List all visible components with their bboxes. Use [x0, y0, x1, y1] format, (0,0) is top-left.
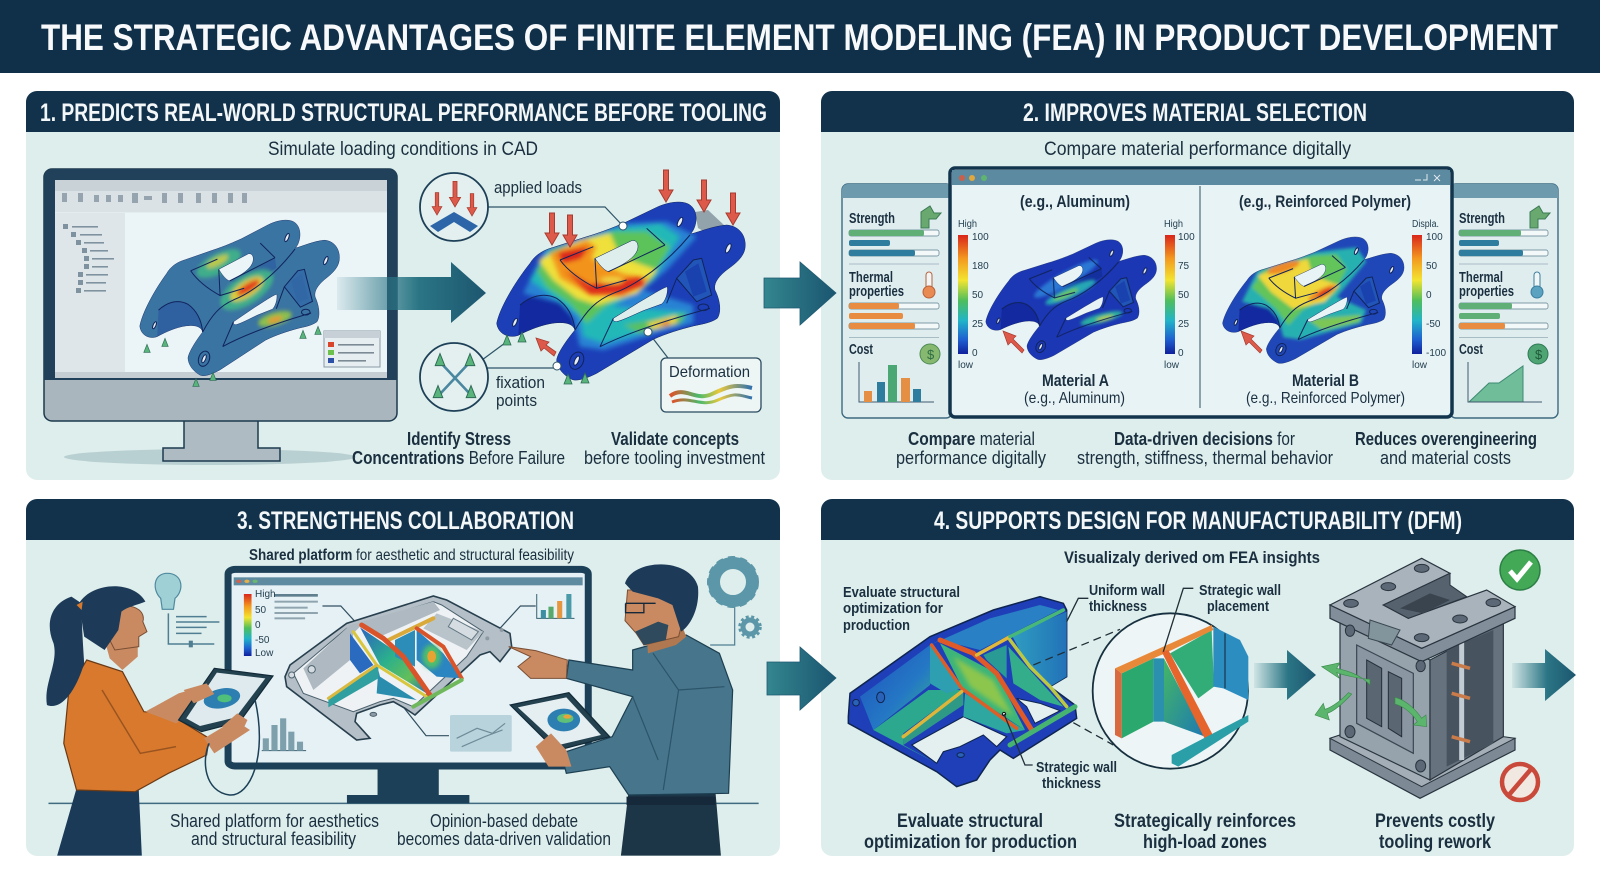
- panel 1: structural performance: [26, 91, 780, 480]
- text: shared platform: Shared platform for aesthetics: [170, 811, 379, 831]
- material A column: 25: [1178, 319, 1190, 330]
- bracket: material B: [1222, 236, 1404, 364]
- label: evaluate structural optimization: production: [843, 617, 910, 634]
- material A column: 50: [1178, 290, 1190, 301]
- panel 1 header: [26, 91, 780, 132]
- label: strategic wall thickness: [1036, 759, 1117, 792]
- callout: deformation: Deformation: [669, 364, 750, 381]
- label: uniform wall thickness: thickness: [1089, 598, 1147, 615]
- text: evaluate structural: Evaluate structural: [897, 811, 1043, 832]
- panel 4 subtitle: Visualizaly derived om FEA insights: [1064, 548, 1320, 567]
- label: strategic wall thickness: thickness: [1042, 775, 1101, 792]
- CAD bracket on screen: [140, 220, 340, 376]
- panel 1 subtitle: Simulate loading conditions in CAD: [268, 138, 538, 160]
- callout leader lines: [482, 207, 668, 368]
- panel 3 header: [26, 499, 780, 540]
- label: strategic wall thickness: Strategic wall: [1036, 759, 1117, 776]
- cost bar chart: [859, 362, 934, 402]
- housing with heat-mapped ribs: [285, 596, 512, 740]
- arrow: mold to outcome: [1512, 649, 1576, 701]
- card: material A properties: Thermal: [849, 270, 893, 286]
- icon: cost coin: [920, 344, 940, 364]
- screen scale labels: 50: [255, 605, 267, 616]
- cable: [205, 700, 259, 795]
- icon: strength: [1530, 206, 1550, 228]
- woman with tablet: [46, 586, 273, 856]
- label: evaluate structural optimization: Evaluate structural: [843, 584, 960, 601]
- screen scale labels: Low: [255, 648, 274, 659]
- card: material A properties: properties: [849, 284, 904, 300]
- on-screen legend: [324, 331, 380, 367]
- screen scale labels: High: [255, 589, 276, 600]
- panel 4 header: [821, 499, 1574, 540]
- text: identify stress concentrations: Identify Stress: [407, 429, 511, 449]
- monitor and floor scene: [48, 569, 759, 803]
- material B column: [1210, 192, 1446, 407]
- card: material B properties: Thermal: [1459, 270, 1503, 286]
- material A column: [958, 192, 1195, 407]
- leader lines: [1004, 598, 1120, 765]
- panel 3 subtitle: Shared platform for aesthetic and structural feasibility: [249, 547, 574, 564]
- icon: cost coin: $: [927, 347, 935, 362]
- label: strategic wall placement: [1199, 582, 1281, 615]
- magnified wall detail: [1093, 613, 1248, 769]
- FEA housing part: [848, 597, 1077, 787]
- text: before failure: Concentrations Before Failure: [352, 448, 565, 468]
- label: fixation points: points: [496, 392, 537, 410]
- material B column: 0: [1426, 290, 1432, 301]
- panel 2 header: [821, 91, 1574, 132]
- screen bar chart: [262, 718, 306, 751]
- text: strength stiffness thermal: strength, stiffness, thermal behavior: [1077, 448, 1333, 468]
- material B column: (e.g., Reinforced Polymer): [1246, 390, 1405, 407]
- panel 2: material selection: [821, 91, 1574, 480]
- panel 1 header: 1. PREDICTS REAL-WORLD STRUCTURAL PERFORMANCE BEFORE TOOLING: [40, 99, 767, 127]
- label: applied loads: applied loads: [494, 179, 582, 197]
- text: strategically reinforces: Strategically reinforces: [1114, 811, 1296, 832]
- FEA stress bracket: [496, 170, 746, 384]
- arrow: panel 1 to 2: [764, 262, 836, 325]
- cost area chart: [1468, 362, 1542, 402]
- text: performance digitally: performance digitally: [896, 448, 1046, 468]
- material B column: -100: [1426, 348, 1446, 359]
- material B column: 100: [1426, 232, 1443, 243]
- text: optimization for production: optimization for production: [864, 832, 1077, 853]
- screen text lines: [274, 594, 318, 619]
- text: prevents costly: Prevents costly: [1375, 811, 1495, 832]
- material A column: 0: [1178, 348, 1184, 359]
- load arrows: [536, 170, 740, 356]
- text: structural feasibility: and structural feasibility: [191, 829, 356, 849]
- text: reduces overengineering: Reduces overengineering: [1355, 429, 1537, 449]
- idea sketch icons: [155, 573, 219, 647]
- icon: prohibition sign: [1502, 764, 1538, 800]
- material A column: High: [958, 219, 977, 230]
- panel 2 header: 2. IMPROVES MATERIAL SELECTION: [1023, 99, 1367, 127]
- material A column: Material A: [1042, 371, 1109, 390]
- material A column: 100: [1178, 232, 1195, 243]
- label: uniform wall thickness: [1089, 582, 1165, 615]
- material A column: 25: [972, 319, 984, 330]
- large shared monitor: [228, 569, 588, 803]
- title banner: [0, 0, 1600, 73]
- material A column: 0: [972, 348, 978, 359]
- icon: check mark: [1500, 550, 1540, 590]
- icon: thermometer: [1531, 272, 1543, 298]
- FEA part with magnified detail: [848, 588, 1248, 787]
- text: tooling rework: tooling rework: [1379, 832, 1491, 853]
- text: compare material: Compare material: [908, 429, 1035, 449]
- material A column: High: [1164, 219, 1183, 230]
- text: opinion-based debate: Opinion-based debate: [430, 811, 578, 831]
- icon: strength: [921, 206, 941, 228]
- colour scale: [244, 594, 252, 656]
- bracket: material A: [974, 232, 1164, 366]
- material B column: low: [1412, 360, 1428, 371]
- material A column: (e.g., Aluminum): [1020, 192, 1130, 211]
- icon: thermometer: [923, 272, 935, 298]
- label: strategic wall placement: placement: [1207, 598, 1269, 615]
- icon: cost coin: [1528, 344, 1548, 364]
- material B column: Displa.: [1412, 219, 1439, 230]
- people and icons scene: [46, 564, 735, 856]
- label: evaluate structural optimization: [843, 584, 960, 634]
- material A column: low: [1164, 360, 1180, 371]
- icon: large gear: [709, 558, 757, 606]
- text: before tooling investment: before tooling investment: [584, 448, 765, 468]
- card: material A properties: Strength: [849, 211, 895, 227]
- icon: applied loads: [420, 173, 488, 241]
- text: and material costs: and material costs: [1380, 448, 1511, 468]
- green flow arrows: [1315, 663, 1427, 727]
- text: validate concepts: Validate concepts: [611, 429, 739, 449]
- arrow: part to mold: [1254, 650, 1316, 700]
- screen scale labels: [255, 589, 276, 659]
- material A column: 75: [1178, 261, 1190, 272]
- card: material B properties: Strength: [1459, 211, 1505, 227]
- text: data-driven decisions: Data-driven decisions for: [1114, 429, 1295, 449]
- material A column: 100: [972, 232, 989, 243]
- label: fixation points: fixation: [496, 374, 545, 392]
- arrow: panel 3 to 4: [767, 647, 836, 710]
- panel 4: design for manufacturability: [821, 499, 1574, 856]
- screen scale labels: -50: [255, 635, 270, 646]
- panel 2 subtitle: Compare material performance digitally: [1044, 138, 1351, 160]
- material B column: 50: [1426, 261, 1438, 272]
- text: data-driven validation: becomes data-driven validation: [397, 829, 611, 849]
- screen scale labels: 0: [255, 620, 261, 631]
- card: material A properties: [842, 184, 952, 418]
- thumbnail: [450, 715, 512, 752]
- text: high-load zones: high-load zones: [1143, 832, 1267, 853]
- label: evaluate structural optimization: optimization for: [843, 600, 943, 617]
- material A column: 50: [972, 290, 984, 301]
- material A column: 180: [972, 261, 989, 272]
- icon: small gear: [740, 616, 760, 638]
- material B column: Material B: [1292, 371, 1359, 390]
- label: uniform wall thickness: Uniform wall: [1089, 582, 1165, 599]
- man pointing with tablet: [509, 564, 735, 856]
- label: strategic wall placement: Strategic wall: [1199, 582, 1281, 599]
- desktop monitor with CAD software: [44, 169, 397, 465]
- card: material B properties: properties: [1459, 284, 1514, 300]
- panel 3: collaboration: [26, 499, 780, 856]
- comparison window: [950, 168, 1452, 417]
- floor line: [48, 802, 759, 804]
- card: material B properties: [1450, 184, 1558, 418]
- callout: deformation: [661, 358, 761, 412]
- arrow: CAD to simulation: [337, 262, 486, 323]
- icon: cost coin: $: [1535, 347, 1543, 362]
- material B column: (e.g., Reinforced Polymer): [1239, 192, 1411, 211]
- panel 4 header: 4. SUPPORTS DESIGN FOR MANUFACTURABILITY (DFM): [934, 507, 1462, 535]
- material B column: -50: [1426, 319, 1441, 330]
- material A column: low: [958, 360, 974, 371]
- inner leader to wall placement: [1163, 588, 1193, 652]
- injection mold: [1315, 558, 1515, 798]
- card: material A properties: Cost: [849, 342, 873, 358]
- panel 3 header: 3. STRENGTHENS COLLABORATION: [237, 507, 574, 535]
- screen mini chart: [537, 594, 574, 618]
- icon: fixation points: [420, 343, 488, 411]
- material A column: (e.g., Aluminum): [1024, 390, 1125, 407]
- card: material B properties: Cost: [1459, 342, 1483, 358]
